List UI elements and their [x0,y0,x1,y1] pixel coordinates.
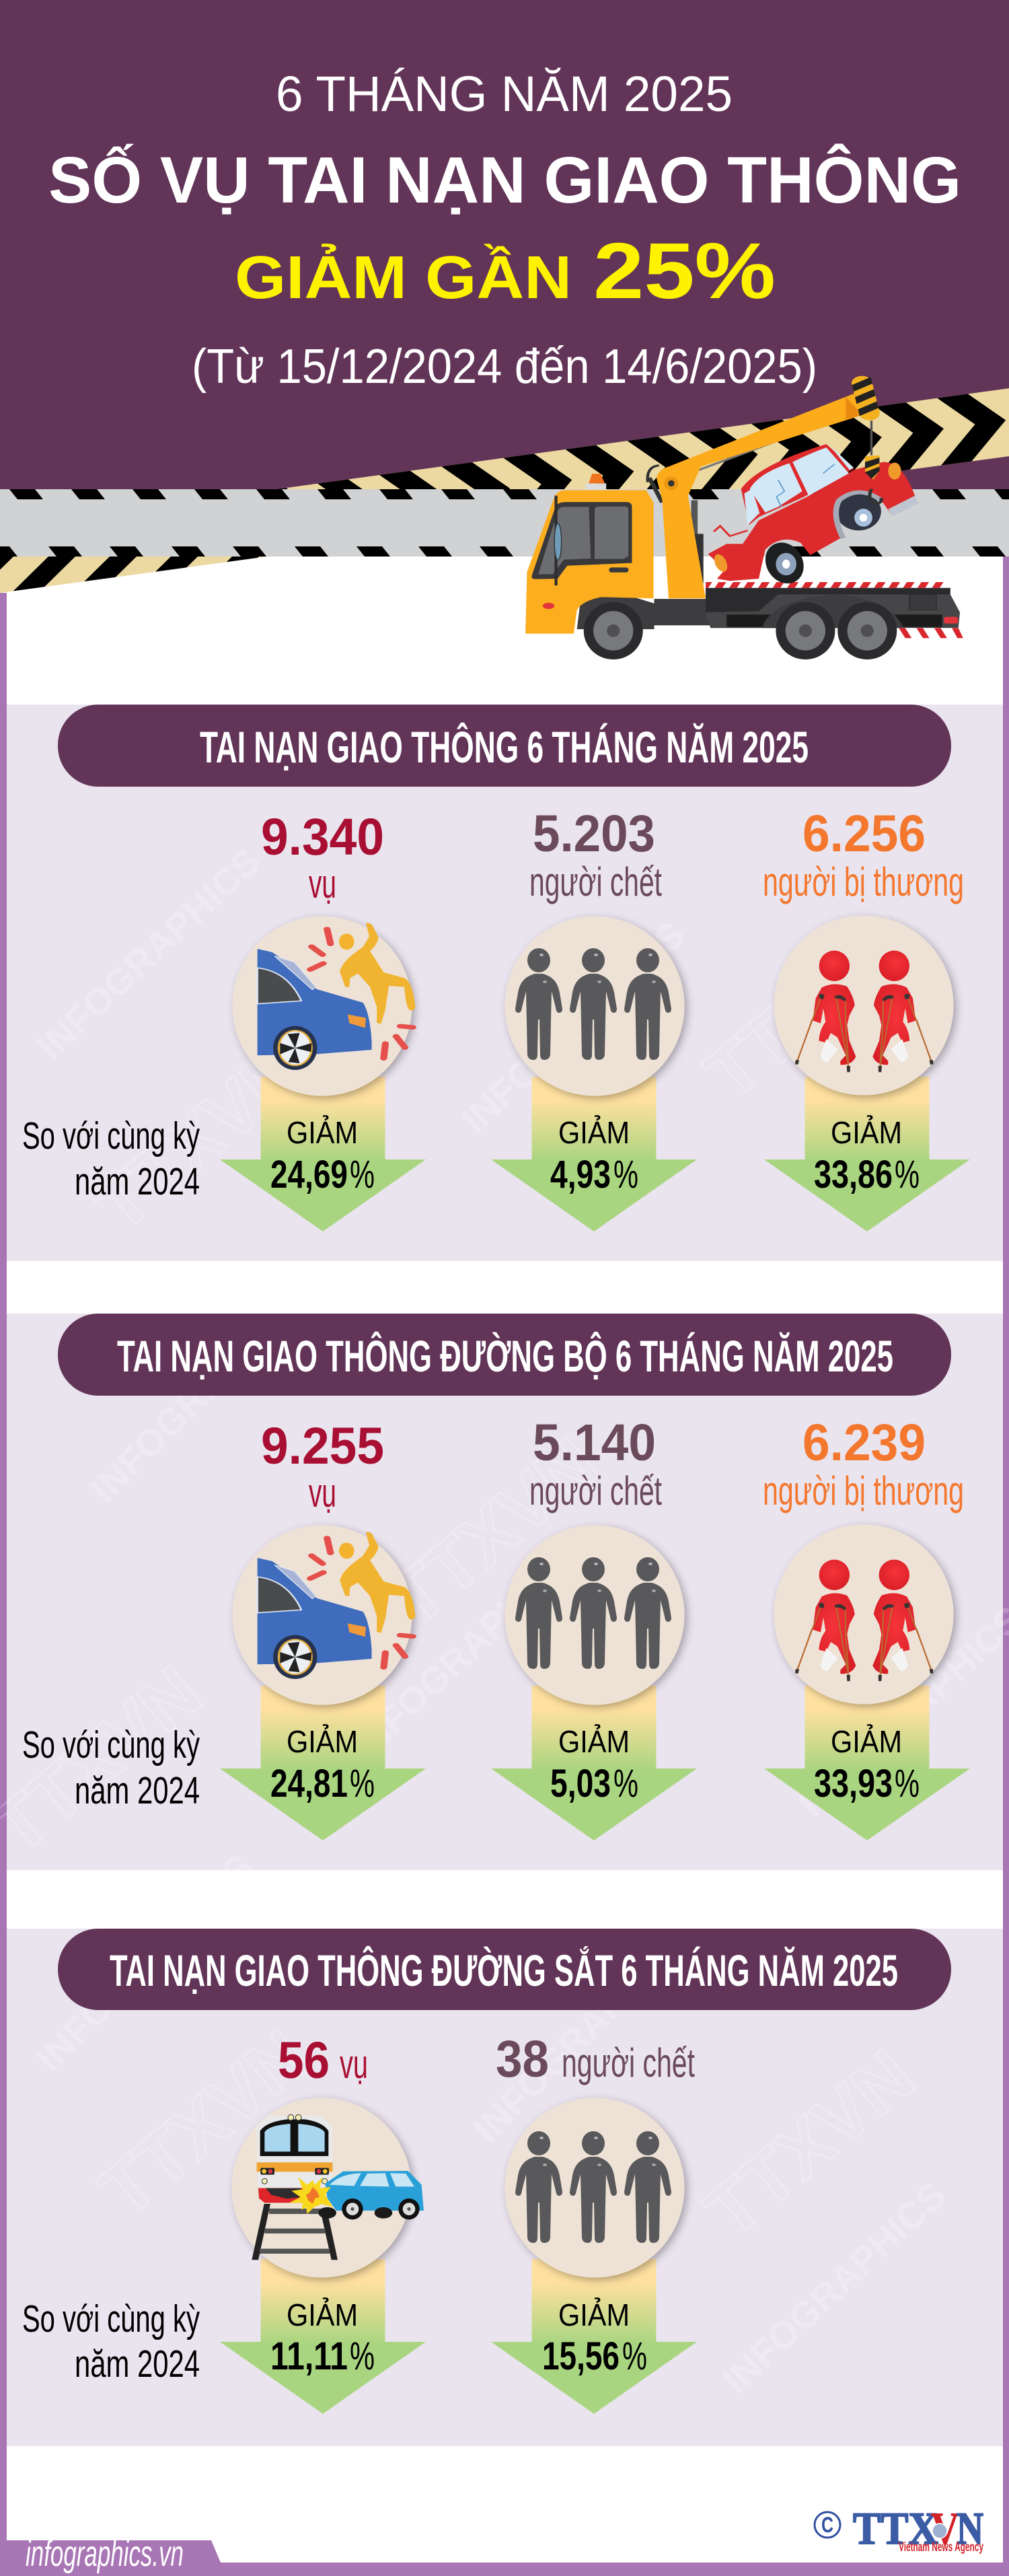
header background [0,0,1009,593]
change: accidents [270,1115,375,1196]
stat: injured: 6.256 [802,805,926,863]
change: accidents: % [350,2334,375,2378]
logo: TTXVN: TTX [853,2503,938,2554]
change: deaths [550,1115,638,1196]
panel: road traffic accidents [22,1314,970,1840]
stat: accidents [261,1417,384,1515]
watermarks: INFOGRAPHICS [28,840,268,1068]
change: deaths: % [613,1762,638,1805]
comparison label [22,2297,200,2386]
watermarks: INFOGRAPHICS [28,1845,262,2079]
title line: highlight [235,227,776,316]
change: accidents: GIẢM [287,1115,358,1150]
change: deaths: 5,03 [550,1762,611,1805]
comparison label: năm 2024 [75,2342,200,2386]
change: deaths: % [613,1153,638,1196]
stat: accidents: vụ [309,861,336,906]
stat: deaths [529,1414,662,1513]
stat: injured [763,805,964,904]
illustration: tow truck with crashed red car [525,375,963,659]
change: injured [814,1724,920,1805]
stat: accidents: vụ [309,1470,336,1515]
hook [850,375,881,489]
comparison label [22,1114,200,1203]
title line: highlight: 25% [593,227,776,316]
truck cab [525,490,654,634]
change: injured [814,1115,920,1196]
watermarks: INFOGRAPHICS [343,1539,583,1767]
arrow: deaths down [491,1686,697,1840]
watermarks: INFOGRAPHICS [82,1276,316,1510]
change: accidents: % [350,1762,375,1805]
icon: three people [504,1525,685,1705]
footer: website tab: infographics.vn [26,2534,184,2574]
stat: deaths: 5.140 [533,1414,656,1472]
stat: deaths: 38 [496,2030,549,2088]
icon: injured figures on crutches [774,915,954,1096]
change: injured: GIẢM [831,1724,902,1759]
watermarks: INFOGRAPHICS [465,1916,699,2150]
logo: TTXVN: V [931,2503,959,2554]
change: deaths: GIẢM [558,1115,630,1150]
comparison label: So với cùng kỳ [22,1723,200,1766]
logo: TTXVN: C [821,2513,833,2537]
arrow: injured down [764,1077,970,1231]
icon: injured figures on crutches [774,1525,954,1704]
change: accidents: GIẢM [287,1724,358,1759]
comparison label: So với cùng kỳ [22,2297,200,2340]
stat: accidents: vụ [340,2042,368,2087]
stat: deaths: người chết [529,859,662,904]
icon: car hitting person [233,1525,415,1705]
arrow: accidents down [220,1686,426,1840]
stat: deaths [496,2030,695,2088]
stat: accidents: 9.340 [261,808,384,866]
change: accidents: GIẢM [287,2297,358,2332]
panel: rail traffic accidents [22,1929,951,2414]
change: injured: 33,93 [814,1762,893,1805]
comparison label: năm 2024 [75,1769,200,1812]
stat: accidents [261,808,384,906]
change: deaths: % [622,2334,647,2378]
change: accidents: 24,69 [270,1153,348,1196]
truck wheels [577,594,903,659]
stat: deaths [529,805,662,904]
stat: deaths: người chết [529,1468,662,1513]
panel: road accidents background [7,1314,1003,1870]
title line: highlight: GIẢM GẦN [235,243,572,312]
panel: general accidents background [7,705,1003,1261]
stat: accidents: 9.255 [261,1417,384,1475]
comparison label [22,1723,200,1812]
stat: deaths: 5.203 [533,805,655,863]
change: deaths [542,2297,647,2378]
watermarks: TTXVN [85,2013,324,2233]
watermarks: INFOGRAPHICS [714,2174,954,2402]
logo: TTXVN: N [957,2503,983,2554]
arrow: deaths down [491,2259,697,2414]
crane boom [648,394,862,598]
crashed car [708,444,918,585]
stat: accidents: 56 [278,2032,330,2089]
icon: train hitting car [231,2098,424,2277]
change: accidents: 24,81 [270,1762,348,1805]
watermarks: INFOGRAPHICS [453,913,693,1141]
title block [48,66,961,394]
change: deaths: GIẢM [558,1724,630,1759]
change: injured: % [895,1153,920,1196]
comparison label: năm 2024 [75,1160,200,1203]
panel: overall traffic accidents [22,705,970,1231]
arrow: deaths down [491,1077,697,1231]
change: deaths [550,1724,638,1805]
change: accidents: 11,11 [270,2334,348,2378]
comparison label: So với cùng kỳ [22,1114,200,1157]
change: injured: GIẢM [831,1115,902,1150]
watermarks: TTXVN [374,1421,613,1641]
icon: three people [504,2098,685,2277]
footer: website tab [0,2534,1009,2576]
heading pill [58,705,951,787]
icon: three people [504,917,685,1096]
watermarks: TTXVN [690,2034,930,2253]
heading pill [58,1314,951,1396]
truck bed and chassis [655,582,963,638]
stat: deaths: người chết [562,2040,695,2085]
change: deaths: 4,93 [550,1153,611,1196]
arrow: accidents down [220,1077,426,1231]
stat: injured: 6.239 [802,1414,926,1472]
stat: accidents [278,2032,368,2089]
watermarks [0,840,1009,2402]
arrow: accidents down [220,2259,426,2414]
change: accidents: % [350,1153,375,1196]
title line: date range: (Từ 15/12/2024 đến 14/6/2025) [192,340,817,394]
change: injured: 33,86 [814,1153,893,1196]
change: accidents [270,2297,375,2378]
watermarks: TTXVN [690,896,930,1116]
heading pill [58,1929,951,2010]
siren [586,474,606,490]
title line: period: 6 THÁNG NĂM 2025 [276,66,733,122]
logo: TTXVN [815,2503,983,2554]
watermarks: TTXVN [79,1028,319,1248]
change: deaths: 15,56 [542,2334,620,2378]
title line: main heading: SỐ VỤ TAI NẠN GIAO THÔNG [48,143,961,217]
change: injured: % [895,1762,920,1805]
change: deaths: GIẢM [558,2297,630,2332]
side borders [0,557,1009,2576]
arrow: injured down [764,1686,970,1840]
change: accidents [270,1724,375,1805]
stat: injured [763,1414,964,1513]
icon: car hitting person [233,917,415,1096]
panel: rail accidents background [7,1929,1003,2446]
